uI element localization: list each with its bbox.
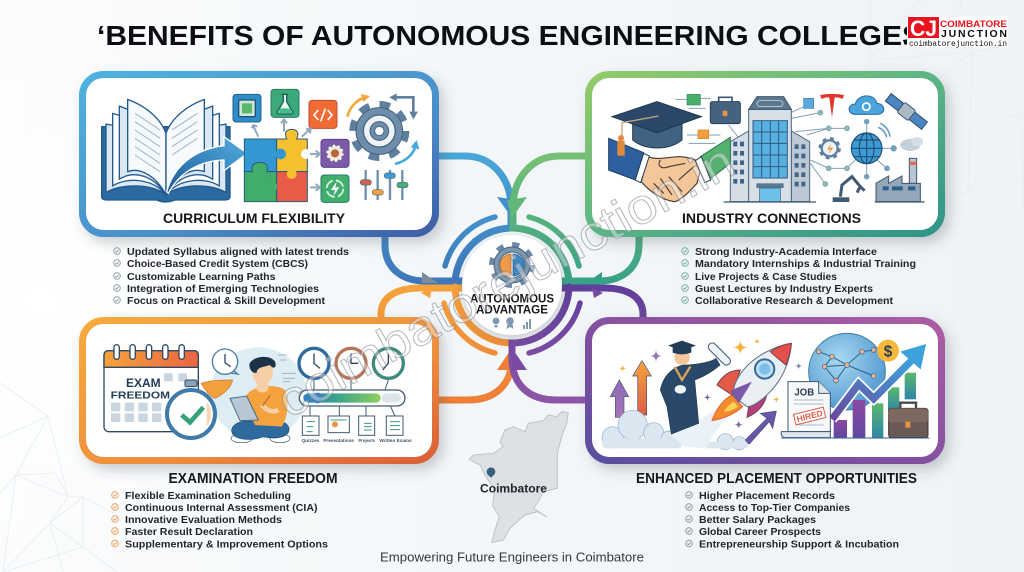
chart: bars — [834, 373, 916, 438]
list: curriculum flexibility benefits: Integration of Emerging Technologies — [127, 283, 319, 295]
labels: assessment types: Projects — [358, 438, 376, 443]
list: curriculum flexibility benefits: Updated Syllabus aligned with latest trends — [127, 246, 349, 258]
connector: blue arrows — [385, 156, 517, 285]
icon: network links — [675, 98, 896, 186]
illustration: book, puzzle and gears — [102, 89, 419, 202]
list: industry connections benefits: Live Projects & Case Studies — [695, 271, 837, 283]
label: Coimbatore: Coimbatore — [480, 482, 547, 496]
list: curriculum flexibility benefits: Focus on Practical & Skill Development — [127, 295, 325, 307]
list: examination freedom benefits: Flexible Examination Scheduling — [125, 490, 291, 502]
icon: purple gear tile — [321, 139, 349, 167]
footer tagline: Empowering Future Engineers in Coimbatore — [380, 550, 644, 564]
list: examination freedom benefits: Innovative Evaluation Methods — [125, 514, 282, 526]
list: industry connections benefits: Mandatory Internships & Industrial Training — [695, 258, 916, 270]
icon: chip tile — [233, 94, 261, 122]
icon: handshake — [609, 137, 730, 202]
icon: job document: HIRED — [796, 408, 824, 424]
title: ‘BENEFITS OF AUTONOMOUS ENGINEERING COLLEGES — [97, 20, 922, 51]
icon: calendar — [104, 345, 198, 432]
icon: sparkles — [619, 338, 803, 429]
icon: student with tablet — [230, 355, 296, 443]
icon: dollar coin: $ — [884, 344, 893, 361]
icon: dollar coin — [877, 340, 899, 362]
list: examination freedom benefits: Supplementary & Improvement Options — [125, 538, 328, 550]
icon: growth arrows — [610, 361, 776, 444]
icon: progress bar — [299, 380, 405, 416]
icon: three clocks — [299, 348, 403, 378]
heading: enhanced placement opportunities: ENHANCED PLACEMENT OPPORTUNITIES — [636, 470, 917, 487]
connector: orange arrows — [381, 287, 512, 400]
heading: industry connections: INDUSTRY CONNECTIONS — [682, 210, 861, 226]
icon: gear — [821, 139, 839, 157]
list: examination freedom benefits: Faster Result Declaration — [125, 526, 253, 538]
list: placement benefits: Higher Placement Records — [699, 490, 835, 502]
icon: green and orange tiles — [687, 94, 814, 139]
icon: small arrows — [252, 119, 320, 191]
icon: globe network — [809, 333, 885, 410]
icon: job document — [781, 382, 830, 438]
icon: calendar: FREEDOM — [111, 391, 170, 402]
icon: cloud — [849, 96, 884, 114]
icon: assessment documents — [302, 416, 403, 435]
labels: assessment types: Quizzes — [302, 438, 320, 443]
center hub: autonomous advantage — [462, 235, 562, 335]
list: curriculum flexibility benefits — [114, 246, 349, 307]
illustration: graduate, rocket and growth — [602, 333, 929, 450]
connector: purple arrows — [512, 287, 643, 400]
panel: curriculum flexibility — [82, 74, 436, 234]
icon: puzzle — [244, 129, 311, 202]
icon: clock bubble — [212, 349, 238, 374]
panel: industry connections — [588, 74, 942, 234]
icon: winged stopwatch — [167, 380, 233, 438]
icon: sliders — [360, 170, 408, 200]
labels: assessment types — [302, 438, 412, 443]
logo: Coimbatore Junction — [904, 16, 1008, 49]
icon: large gear — [353, 105, 405, 157]
illustration: exam freedom scene — [104, 345, 412, 443]
icon: briefcase — [710, 97, 740, 124]
logo: Coimbatore Junction: COIMBATORE — [940, 19, 1007, 30]
icon: robot arm — [833, 177, 865, 202]
map: Tamil Nadu — [469, 412, 568, 543]
list: curriculum flexibility benefits: Customizable Learning Paths — [127, 271, 276, 283]
list: placement benefits: Access to Top-Tier Companies — [699, 502, 850, 514]
icon: code tile — [309, 100, 337, 128]
panel: enhanced placement opportunities — [588, 320, 942, 460]
icon: globe — [851, 123, 890, 164]
logo: Coimbatore Junction: CJ — [910, 16, 937, 41]
icon: blue arrow — [167, 137, 247, 193]
logo: Coimbatore Junction: JUNCTION — [941, 28, 1007, 40]
text: autonomous advantage — [470, 292, 554, 316]
list: industry connections benefits: Strong Industry-Academia Interface — [695, 246, 877, 258]
icon: tesla logo — [820, 94, 844, 117]
icon: office building — [724, 97, 816, 202]
panel: examination freedom — [82, 320, 436, 460]
illustration: handshake, building and network — [609, 92, 928, 202]
icon: briefcase — [781, 403, 929, 438]
icon: rotation arrows — [347, 93, 419, 164]
icon: calendar: EXAM — [126, 376, 161, 390]
list: placement benefits — [686, 490, 899, 550]
icon: open book — [102, 99, 230, 202]
labels: assessment types: Written Exams — [379, 438, 412, 443]
icon: gear with brain — [493, 246, 531, 284]
icon: trend arrow — [832, 344, 926, 419]
heading: examination freedom: EXAMINATION FREEDOM — [168, 470, 338, 487]
list: industry connections benefits: Guest Lectures by Industry Experts — [695, 283, 873, 295]
list: placement benefits: Global Career Prospects — [699, 526, 821, 538]
icon: satellite — [884, 92, 928, 131]
watermark: coimbatorejunction.in — [268, 134, 744, 429]
list: examination freedom benefits: Continuous Internal Assessment (CIA) — [125, 502, 318, 514]
icon: factory — [875, 137, 925, 202]
icon: location pin — [487, 467, 495, 478]
logo: Coimbatore Junction: coimbatorejunction.in — [909, 39, 1007, 49]
icon: graduation cap — [612, 102, 701, 156]
icon: rocket — [712, 343, 791, 421]
icon: graduate — [660, 341, 732, 434]
list: placement benefits: Better Salary Packages — [699, 514, 816, 526]
heading: curriculum flexibility: CURRICULUM FLEXIBILITY — [163, 210, 346, 226]
text: autonomous advantage: ADVANTAGE — [476, 302, 548, 316]
list: industry connections benefits — [682, 246, 916, 307]
icon: flask tile — [271, 89, 299, 117]
list: curriculum flexibility benefits: Choice-Based Credit System (CBCS) — [127, 258, 308, 270]
connector: green arrows — [507, 156, 639, 285]
text: autonomous advantage: AUTONOMOUS — [470, 292, 554, 306]
list: examination freedom benefits — [112, 490, 328, 550]
icon: clouds — [602, 407, 748, 450]
icon: green bolt tile — [321, 175, 349, 202]
icon: student backdrop — [210, 347, 307, 439]
list: industry connections benefits: Collaborative Research & Development — [695, 295, 893, 307]
list: placement benefits: Entrepreneurship Support & Incubation — [699, 538, 899, 550]
icons: bulb, medal, chart — [493, 317, 531, 329]
labels: assessment types: Presentations — [323, 438, 355, 443]
icon: job document: JOB — [794, 387, 814, 398]
